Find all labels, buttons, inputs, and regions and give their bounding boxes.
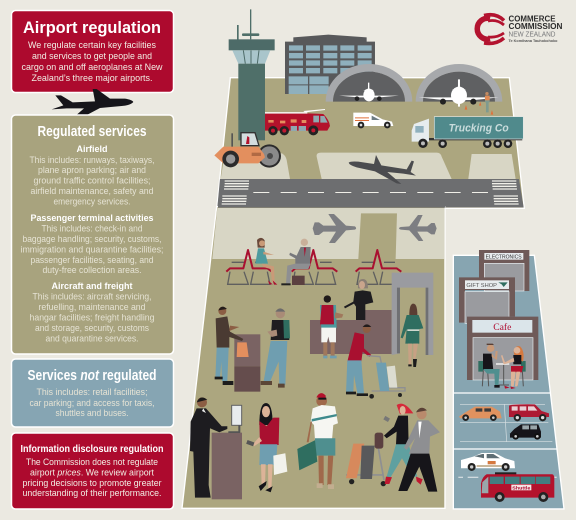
woman walking through security — [401, 304, 423, 367]
subsection: passenger terminal activities: duty-free collection areas. — [42, 265, 142, 275]
counter staff woman — [344, 279, 373, 320]
passenger terminal scene — [182, 205, 445, 508]
dark aeroplane taking off — [349, 155, 416, 184]
divider lines — [453, 393, 557, 449]
shop: electronics: ELECTRONICS — [486, 254, 522, 260]
aeroplane silhouette 2 — [399, 215, 437, 241]
text: services not regulated — [30, 387, 154, 418]
text: logo wordmark: Te Komihana Tauhokohoko — [508, 39, 558, 43]
red shuttle bus: Shuttle — [512, 485, 531, 490]
bottom check-in desk with monitor — [212, 405, 242, 499]
heading: regulated services: Regulated services — [38, 124, 146, 140]
car park markings — [460, 404, 552, 442]
seated man with briefcase — [281, 239, 311, 285]
shop: cafe with couple: Cafe — [493, 322, 511, 333]
panel background — [453, 255, 564, 509]
terminal building — [285, 35, 375, 94]
traveller with red backpack — [320, 295, 343, 358]
hangar 2 with plane and worker — [416, 64, 502, 115]
text: logo wordmark — [508, 14, 563, 43]
text: airport regulation intro: Zealand’s three major airports. — [32, 73, 152, 83]
red shuttle bus — [481, 472, 554, 502]
subsection: aircraft and freight: refuelling, maintenance and — [38, 302, 146, 312]
woman in red top — [246, 403, 287, 492]
car: red SUV — [509, 404, 549, 421]
subsection: aircraft and freight: Aircraft and freight — [52, 281, 133, 292]
car: orange estate — [459, 407, 502, 421]
subsection: airfield: emergency services. — [54, 196, 130, 206]
seated woman — [255, 238, 277, 285]
runway — [217, 179, 524, 207]
text: airport regulation intro: cargo on and off aeroplanes at New — [22, 62, 163, 72]
subsection: aircraft and freight: This includes: aircraft servicing, — [32, 292, 152, 302]
panel: airport regulation — [12, 10, 174, 92]
text: information disclosure — [22, 457, 162, 498]
subsection: aircraft and freight — [30, 281, 154, 344]
heading: services not regulated: Services not regulated — [28, 368, 156, 384]
airfield scene — [217, 35, 524, 208]
text: logo wordmark: NEW ZEALAND — [508, 30, 556, 38]
subsection: airfield: This includes: runways, taxiways, — [30, 155, 154, 165]
control tower — [229, 9, 275, 140]
man with orange bag — [215, 307, 243, 385]
subsection: passenger terminal activities: Passenger terminal activities — [30, 213, 154, 224]
car: black hatchback — [510, 424, 541, 440]
kiosk desk — [234, 334, 260, 392]
shop: gift shop: GIFT SHOP — [466, 283, 497, 289]
ground worker and cones — [465, 92, 493, 115]
subsection: airfield: ground traffic control facilities; — [34, 176, 150, 186]
apron ground — [217, 78, 524, 208]
terminal floor — [182, 207, 445, 508]
agent in black suit — [190, 397, 227, 498]
logo: Commerce Commission New Zealand — [477, 14, 563, 43]
security gate — [392, 273, 433, 355]
aeroplane silhouette 1 — [313, 214, 356, 243]
shop: electronics — [479, 250, 529, 291]
subsection: airfield: airfield maintenance, safety and — [30, 186, 154, 196]
man in white shirt with green suitcase — [297, 393, 338, 489]
security officer — [261, 308, 290, 388]
woman and man with luggage trolley — [346, 404, 440, 492]
text: information disclosure: pricing decisions to promote greater — [22, 478, 162, 488]
subsection: passenger terminal activities: baggage handling; security, customs, — [22, 234, 162, 244]
subsection: passenger terminal activities: passenger facilities, seating, and — [30, 255, 154, 265]
hangar 1 with plane — [326, 64, 412, 102]
icon: logo mark — [477, 15, 504, 43]
subsection: passenger terminal activities: This includes: check-in and — [42, 224, 142, 234]
truck with Trucking Co trailer — [412, 117, 523, 148]
orange road roller — [214, 133, 281, 168]
text: airport regulation intro: and services to get people and — [32, 51, 152, 61]
truck with Trucking Co trailer: Trucking Co — [449, 122, 509, 134]
subsection: aircraft and freight: and storage, security, customs — [35, 323, 149, 333]
subsection: airfield: Airfield — [76, 144, 108, 155]
text: logo wordmark: COMMISSION — [508, 22, 563, 31]
subsection: aircraft and freight: and quarantine services. — [46, 334, 138, 344]
text: logo wordmark: COMMERCE — [508, 14, 556, 24]
terminal back wall — [212, 208, 444, 259]
check-in counter — [310, 310, 392, 354]
text: services not regulated: This includes: retail facilities; — [36, 387, 148, 397]
cafe couple at table — [478, 344, 526, 389]
car: white taxi — [461, 453, 515, 471]
shop: cafe with couple — [467, 317, 538, 389]
subsection: passenger terminal activities — [20, 213, 164, 275]
text: information disclosure: The Commission does not regulate — [26, 457, 158, 467]
man with luggage trolley — [346, 324, 405, 399]
icon: black aeroplane — [52, 89, 133, 120]
subsection: airfield — [30, 144, 154, 206]
text: airport regulation intro — [22, 40, 163, 83]
subsection: aircraft and freight: hangar facilities; freight handling — [30, 312, 154, 322]
runway edge — [218, 205, 445, 208]
taxiway patches — [221, 153, 516, 179]
retail and landside panel — [453, 250, 564, 509]
text: services not regulated: car parking; and access for taxis, — [30, 398, 154, 408]
lane dashes — [458, 476, 557, 479]
panel: information disclosure regulation — [12, 433, 174, 509]
heading: airport regulation: Airport regulation — [23, 18, 161, 37]
waiting seats — [226, 250, 401, 284]
panel: services not regulated — [12, 359, 174, 427]
text: information disclosure: airport prices. We review airport — [30, 468, 154, 478]
heading: information disclosure regulation: Information disclosure regulation — [20, 444, 164, 455]
text: information disclosure: understanding of their performance. — [22, 488, 162, 498]
subsection: passenger terminal activities: immigration and quarantine facilities; — [20, 244, 164, 254]
subsection: airfield: plane apron parking; air and — [38, 165, 146, 175]
shop: gift shop — [459, 277, 515, 323]
text: airport regulation intro: We regulate certain key facilities — [28, 40, 156, 50]
white van — [353, 113, 393, 128]
fire truck — [265, 109, 330, 135]
panel: regulated services — [12, 115, 174, 354]
text: services not regulated: shuttles and buses. — [56, 408, 128, 418]
corridor opening — [358, 213, 397, 259]
